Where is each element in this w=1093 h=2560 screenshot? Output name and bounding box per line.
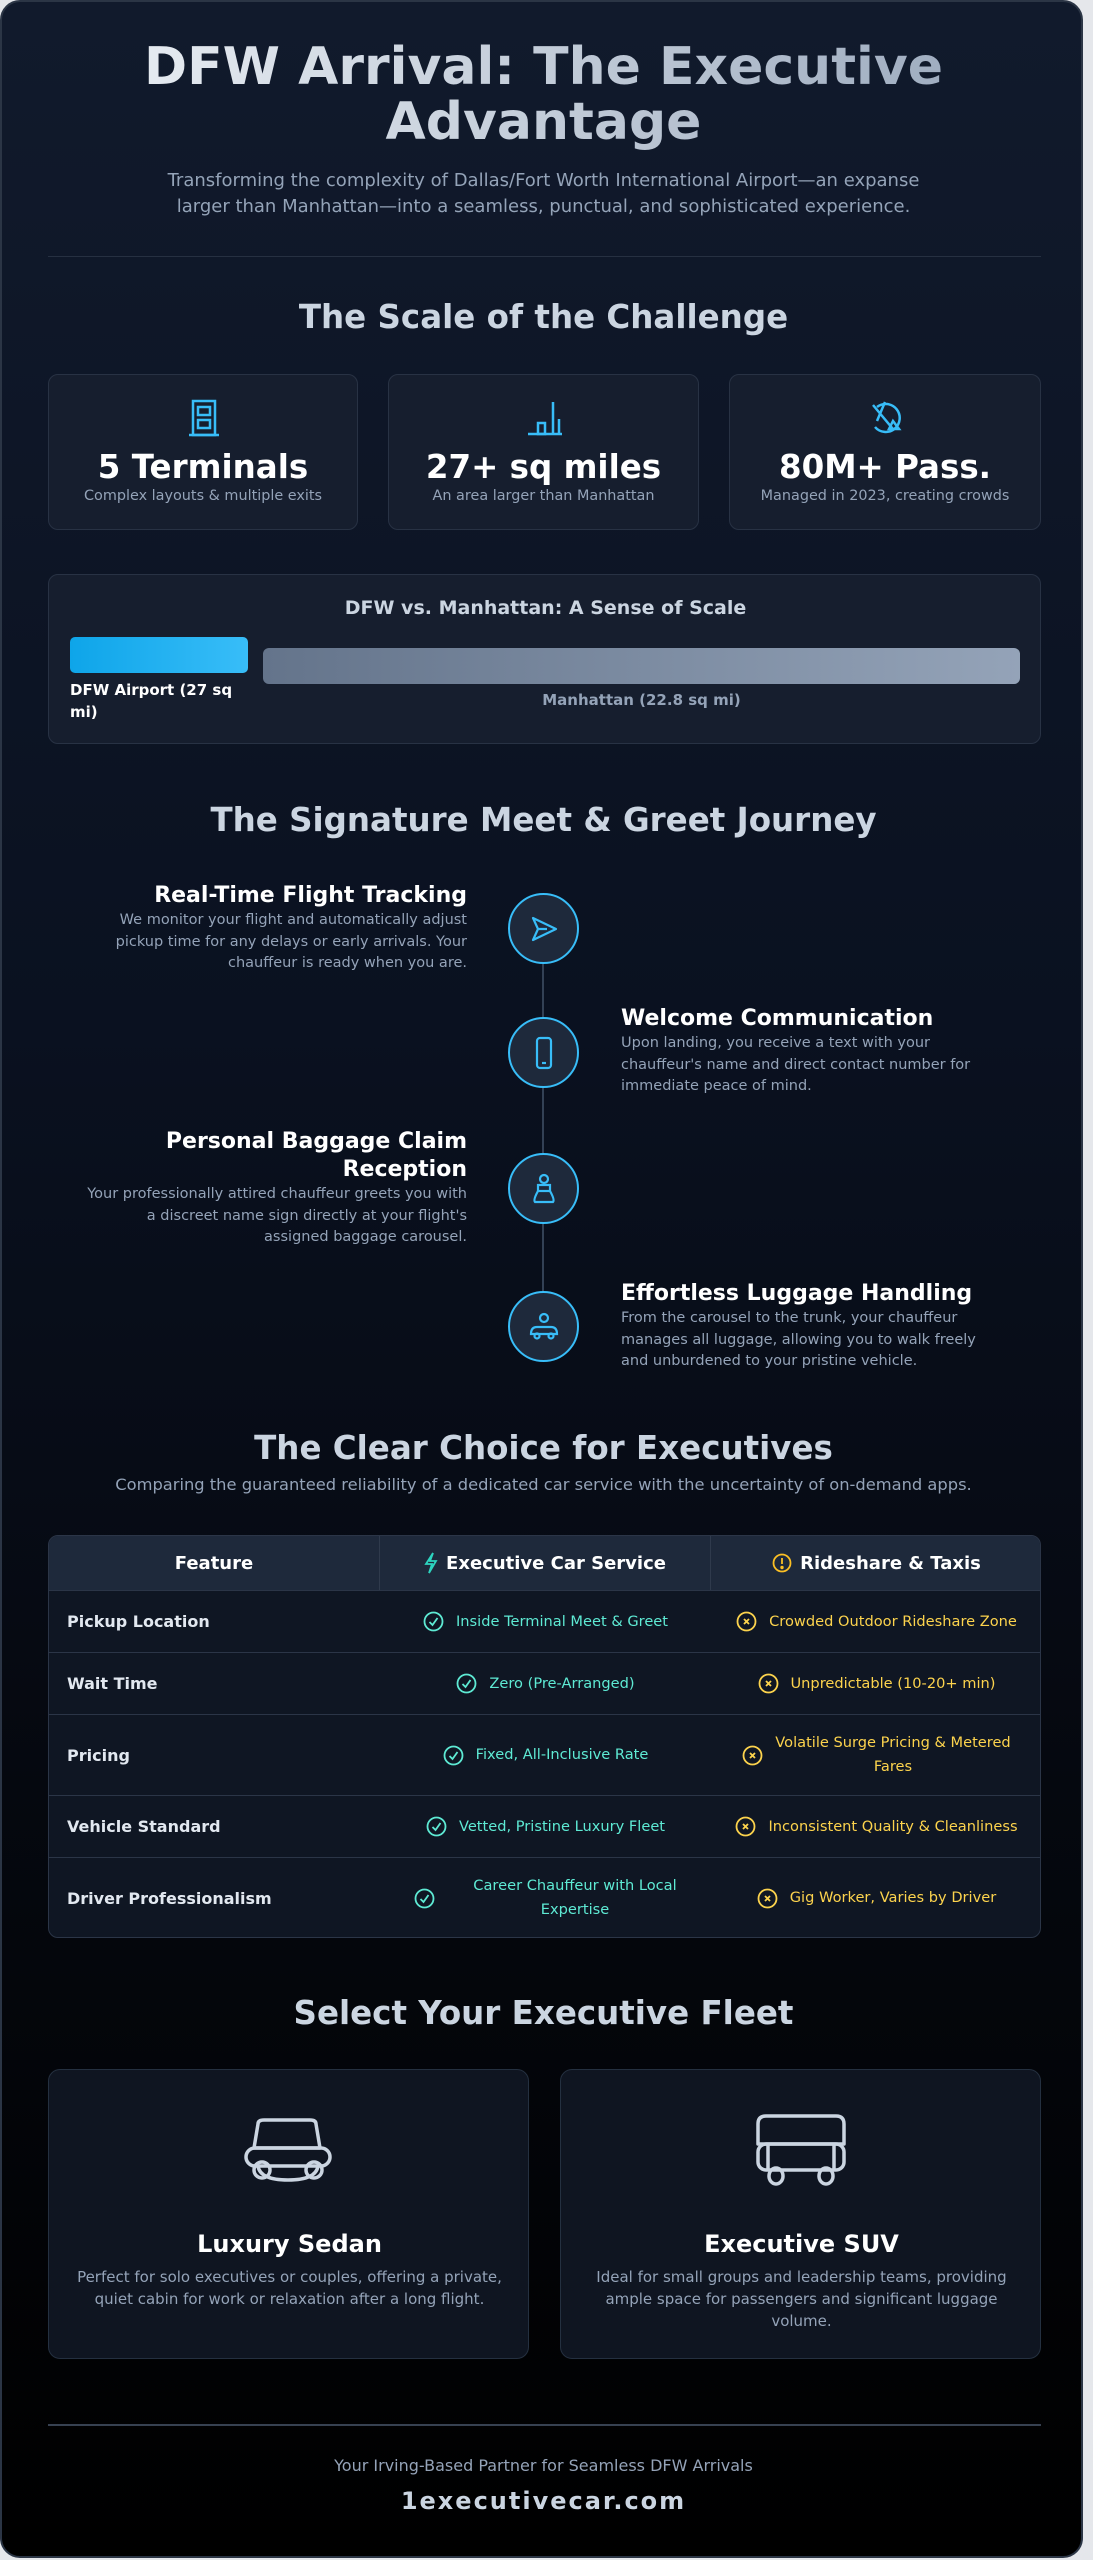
row: pickup xyxy=(49,1590,1042,1652)
row: driver: Gig Worker, Varies by Driver xyxy=(790,1889,996,1906)
step 4 text: manages all luggage, allowing you to walk freely xyxy=(621,1332,976,1348)
footer url: 1executivecar.com xyxy=(401,2487,686,2515)
subheading: Comparing the guaranteed reliability of a dedicated car service with the uncertainty of on-demand apps. xyxy=(115,1475,972,1494)
table header: Feature xyxy=(175,1552,253,1574)
stat card: terminals: Complex layouts & multiple exits xyxy=(84,488,322,504)
bar: DFW xyxy=(70,637,248,673)
fleet card: SUV: Ideal for small groups and leadership teams, providing xyxy=(596,2268,1007,2286)
row: pricing: Pricing xyxy=(67,1746,130,1764)
row: vehicle: Vetted, Pristine Luxury Fleet xyxy=(459,1818,665,1834)
step 2 text: immediate peace of mind. xyxy=(621,1078,812,1094)
icon: phone xyxy=(508,1017,579,1088)
stat card: passengers: Managed in 2023, creating crowds xyxy=(761,488,1009,504)
row: driver xyxy=(49,1857,1042,1938)
stat card: passengers xyxy=(729,374,1041,530)
heading: fleet: Select Your Executive Fleet xyxy=(294,1994,793,2032)
stat card: passengers: 80M+ Pass. xyxy=(779,448,991,486)
subtitle: larger than Manhattan—into a seamless, punctual, and sophisticated experience. xyxy=(177,196,910,217)
label: DFW: DFW Airport (27 sq xyxy=(70,681,232,699)
row: vehicle: Inconsistent Quality & Cleanliness xyxy=(768,1818,1018,1834)
fleet card: SUV xyxy=(560,2069,1041,2359)
step 3 text: a discreet name sign directly at your flight's xyxy=(147,1208,467,1224)
icon: car with person xyxy=(508,1291,579,1362)
title: DFW Arrival: The Executive xyxy=(144,37,943,97)
step 1 text: Real-Time Flight Tracking xyxy=(154,883,467,908)
icon: SUV xyxy=(756,2114,846,2186)
table header: Rideshare & Taxis xyxy=(800,1552,981,1574)
icon: globe plane xyxy=(872,402,902,434)
heading: clear choice: The Clear Choice for Executives xyxy=(254,1429,833,1467)
panel: DFW vs Manhattan chart xyxy=(48,574,1041,744)
footer tagline: Your Irving-Based Partner for Seamless DFW Arrivals xyxy=(334,2456,753,2475)
fleet card: SUV: ample space for passengers and significant luggage xyxy=(605,2290,998,2308)
step 3 text: assigned baggage carousel. xyxy=(264,1229,467,1245)
row: pricing: Volatile Surge Pricing & Metered xyxy=(775,1734,1011,1751)
row: driver: Career Chauffeur with Local xyxy=(473,1877,677,1894)
step 4 text: and unburdened to your pristine vehicle. xyxy=(621,1353,917,1369)
step 3 text: Reception xyxy=(343,1157,467,1182)
step 2 text: Welcome Communication xyxy=(621,1006,933,1031)
table header xyxy=(49,1536,1042,1590)
step 4 text xyxy=(621,1281,976,1369)
row: pricing: Fares xyxy=(874,1758,912,1775)
step 1 text: chauffeur is ready when you are. xyxy=(228,955,467,971)
icon: plane send xyxy=(508,893,579,964)
row: driver: Driver Professionalism xyxy=(67,1888,272,1908)
row: pickup: Pickup Location xyxy=(67,1612,210,1631)
row: wait xyxy=(49,1652,1042,1714)
stat card: terminals xyxy=(48,374,358,530)
step 3 text: Personal Baggage Claim xyxy=(166,1129,467,1154)
row: pricing xyxy=(49,1714,1042,1795)
subtitle: Transforming the complexity of Dallas/Fort Worth International Airport—an expanse xyxy=(168,170,919,191)
icon: chauffeur xyxy=(508,1153,579,1224)
stat card: area xyxy=(388,374,699,530)
row: vehicle: Vehicle Standard xyxy=(67,1817,221,1836)
table header: Executive Car Service xyxy=(446,1552,666,1574)
step 2 text xyxy=(621,1006,970,1094)
row: vehicle xyxy=(49,1795,1042,1857)
step 4 text: Effortless Luggage Handling xyxy=(621,1281,972,1306)
icon: chart xyxy=(528,402,562,436)
step 3 text xyxy=(87,1129,467,1245)
step 1 text: We monitor your flight and automatically adjust xyxy=(120,912,467,928)
row: wait: Wait Time xyxy=(67,1674,158,1693)
fleet card: sedan xyxy=(48,2069,529,2359)
label: DFW: mi) xyxy=(70,703,98,721)
step 1 text: pickup time for any delays or early arrivals. Your xyxy=(116,934,467,950)
fleet card: SUV: Executive SUV xyxy=(704,2230,899,2258)
chart title: DFW vs. Manhattan: A Sense of Scale xyxy=(345,597,746,619)
subtitle xyxy=(168,170,919,217)
stat card: area: 27+ sq miles xyxy=(426,448,661,486)
heading: journey: The Signature Meet & Greet Journey xyxy=(210,801,877,839)
step 3 text: Your professionally attired chauffeur greets you with xyxy=(87,1186,467,1202)
row: pickup: Inside Terminal Meet & Greet xyxy=(456,1612,668,1630)
row: pricing: Fixed, All-Inclusive Rate xyxy=(476,1746,648,1763)
icon: sedan xyxy=(244,2118,332,2182)
step 2 text: Upon landing, you receive a text with your xyxy=(621,1035,930,1051)
label: DFW xyxy=(70,681,232,721)
label: Manhattan: Manhattan (22.8 sq mi) xyxy=(542,691,741,709)
step 4 text: From the carousel to the trunk, your chauffeur xyxy=(621,1310,957,1326)
fleet card: sedan: Perfect for solo executives or couples, offering a private, xyxy=(77,2268,502,2286)
bar: Manhattan xyxy=(263,648,1020,684)
title: Advantage xyxy=(386,92,701,152)
stat card: terminals: 5 Terminals xyxy=(98,448,308,486)
step 1 text xyxy=(116,883,467,971)
row: pickup: Crowded Outdoor Rideshare Zone xyxy=(769,1612,1017,1630)
title xyxy=(2,40,1085,150)
fleet card: sedan: quiet cabin for work or relaxation after a long flight. xyxy=(95,2290,484,2308)
row: wait: Zero (Pre-Arranged) xyxy=(489,1674,635,1692)
row: wait: Unpredictable (10-20+ min) xyxy=(790,1674,995,1692)
icon: terminal building xyxy=(189,400,219,436)
stat card: area: An area larger than Manhattan xyxy=(433,488,654,504)
heading: scale of the challenge: The Scale of the Challenge xyxy=(299,298,788,336)
fleet card: sedan: Luxury Sedan xyxy=(197,2230,382,2258)
row: driver: Expertise xyxy=(541,1901,609,1918)
comparison table xyxy=(48,1535,1041,1938)
step 2 text: chauffeur's name and direct contact number for xyxy=(621,1057,970,1073)
fleet card: SUV: volume. xyxy=(771,2312,832,2330)
